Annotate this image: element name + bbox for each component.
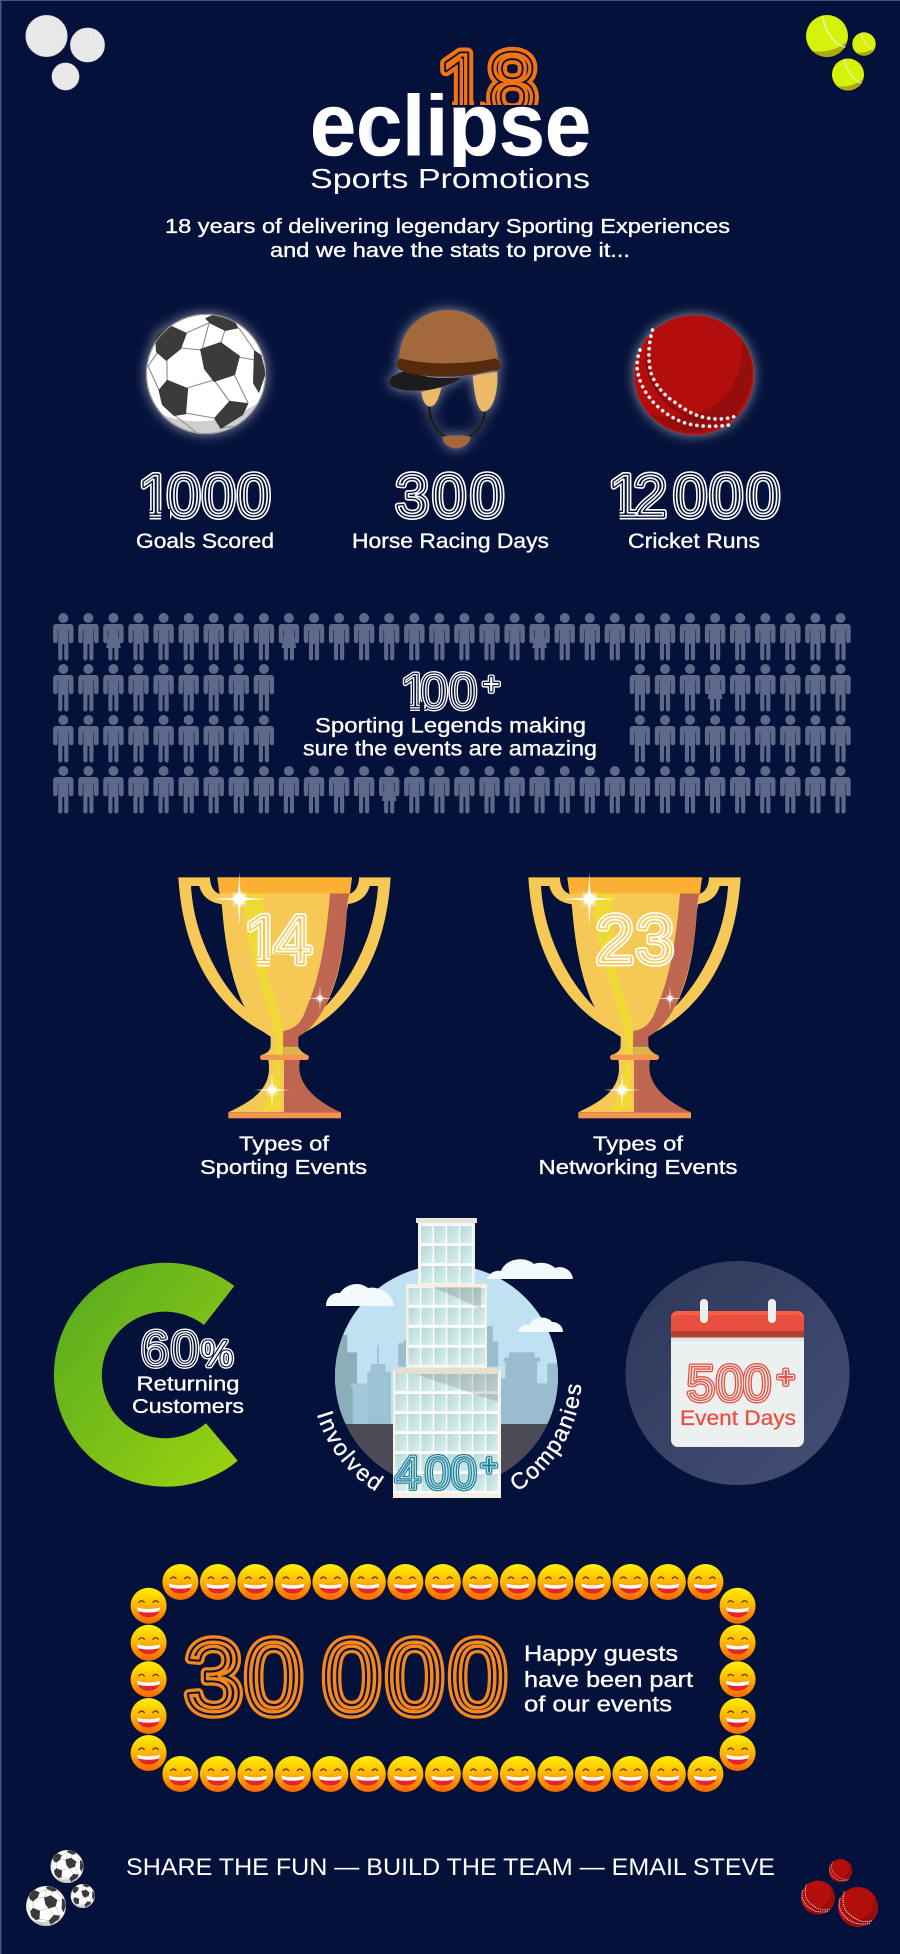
logo: orange 18: 18 — [438, 34, 537, 133]
stat: 30 000: 30000 — [185, 1620, 506, 1734]
label: Companies: Companies — [511, 1384, 582, 1489]
label: happy guests — [524, 1641, 693, 1717]
stat: 500+: + — [777, 1361, 795, 1394]
stat: 400+: + — [480, 1450, 497, 1482]
icon: football — [146, 314, 266, 434]
illustration: city and skyscraper — [326, 1218, 573, 1501]
stat: 23: 23 — [596, 902, 674, 978]
icon: calendar — [671, 1299, 804, 1447]
stat: 14 — [247, 912, 314, 968]
icon: golf balls — [26, 15, 104, 90]
stat: 30 000: 30000 — [185, 1620, 506, 1734]
logo: eclipse wordmark: eclipse — [310, 74, 591, 174]
label: sporting legends: Sporting Legends making — [315, 715, 586, 738]
icon: skyscraper — [393, 1218, 501, 1498]
stat: 60%: % — [201, 1333, 233, 1374]
stat: 60%: 60 — [141, 1321, 199, 1377]
stat: 400+: 400 — [395, 1446, 477, 1498]
tagline — [165, 216, 730, 262]
stat: 300: 300 — [396, 462, 504, 530]
label: sporting legends — [303, 715, 597, 761]
stat: 400+ — [394, 1454, 498, 1492]
label: returning customers — [132, 1374, 244, 1418]
label: returning customers: Customers — [132, 1396, 244, 1418]
stat: 100+: + — [482, 668, 500, 701]
stat: 100+: + — [482, 668, 500, 701]
label: Horse Racing Days: Horse Racing Days — [352, 530, 549, 553]
stat: 60%: % — [201, 1333, 233, 1374]
stat: 500+: 500 — [687, 1356, 771, 1412]
stat: 1000: 1000 — [138, 462, 270, 530]
stat: 400+: 400 — [395, 1446, 477, 1498]
icon: jockey helmet — [389, 310, 501, 448]
logo: orange 18 — [440, 46, 539, 105]
icon: clouds — [326, 1259, 573, 1332]
stat: 1000: 1000 — [138, 462, 270, 530]
stat: 12 000: 12000 — [608, 462, 780, 530]
icon: footballs — [26, 1850, 95, 1926]
label: happy guests: have been part — [524, 1667, 693, 1692]
label: sporting legends: sure the events are amazing — [303, 738, 597, 761]
stat: 500+ — [686, 1363, 796, 1404]
stat: 300: 300 — [396, 462, 504, 530]
stat: 1000: 1000 — [138, 462, 270, 530]
logo: eclipse wordmark — [312, 93, 588, 167]
icon: trophy left — [178, 872, 391, 1118]
stat: 400+: + — [480, 1450, 497, 1482]
icon: tennis balls — [806, 15, 876, 91]
logo: orange 18: 18 — [438, 34, 537, 133]
stat: 12 000: 12000 — [608, 462, 780, 530]
stat: 100+ — [402, 671, 502, 712]
label: Event Days: Event Days — [680, 1407, 796, 1430]
tagline: and we have the stats to prove it... — [270, 240, 630, 262]
people grid — [53, 613, 851, 814]
panel: event days circle — [626, 1261, 850, 1485]
stat: 100+: 100 — [400, 663, 477, 719]
stat: 300: 300 — [396, 462, 504, 530]
stat: 100+: 100 — [400, 663, 477, 719]
tagline: 18 years of delivering legendary Sporting Experiences — [165, 216, 730, 238]
icon: cricket balls — [801, 1859, 878, 1927]
label: Cricket Runs: Cricket Runs — [628, 530, 760, 553]
stat: 500+: + — [777, 1361, 795, 1394]
stat: 100+: + — [482, 668, 500, 701]
stat: 500+: + — [777, 1361, 795, 1394]
stat: 400+: + — [480, 1450, 497, 1482]
stat: 60%: % — [201, 1333, 233, 1374]
stat: 400+: 400 — [395, 1446, 477, 1498]
logo: Sports Promotions: Sports Promotions — [310, 163, 590, 194]
label: happy guests: of our events — [524, 1692, 672, 1717]
footer call to action: SHARE THE FUN — BUILD THE TEAM — EMAIL STEVE — [126, 1854, 775, 1881]
stat: 14: 14 — [244, 902, 312, 978]
emoji frame — [131, 1564, 756, 1792]
label: networking events: Types of — [593, 1134, 684, 1156]
icon: cricket ball — [634, 315, 754, 435]
stat: 14: 14 — [244, 902, 312, 978]
label: Involved: Involved — [317, 1411, 384, 1491]
stat: 100+: 100 — [400, 663, 477, 719]
stat: 23: 23 — [596, 902, 674, 978]
label: networking events — [538, 1134, 738, 1179]
label: sporting events: Sporting Events — [200, 1157, 367, 1179]
stat: 23: 23 — [596, 902, 674, 978]
stat: 14: 14 — [244, 902, 312, 978]
stat: 60%: 60 — [141, 1321, 199, 1377]
label: sporting events: Types of — [239, 1134, 330, 1156]
label: sporting events — [200, 1134, 367, 1179]
stat: 12 000: 12000 — [608, 462, 780, 530]
label: returning customers: Returning — [136, 1374, 240, 1396]
stat: 60% — [141, 1328, 234, 1369]
icon: trophy right — [528, 872, 741, 1118]
chart: 60 percent ring — [54, 1263, 238, 1487]
stat: 500+: 500 — [687, 1356, 771, 1412]
label: happy guests: Happy guests — [524, 1641, 678, 1666]
stat: 60%: 60 — [141, 1321, 199, 1377]
label: networking events: Networking Events — [538, 1157, 738, 1179]
logo: orange 18: 18 — [438, 34, 537, 133]
stat: 500+: 500 — [687, 1356, 771, 1412]
label: Goals Scored: Goals Scored — [136, 530, 274, 553]
stat: 30 000: 30000 — [185, 1620, 506, 1734]
